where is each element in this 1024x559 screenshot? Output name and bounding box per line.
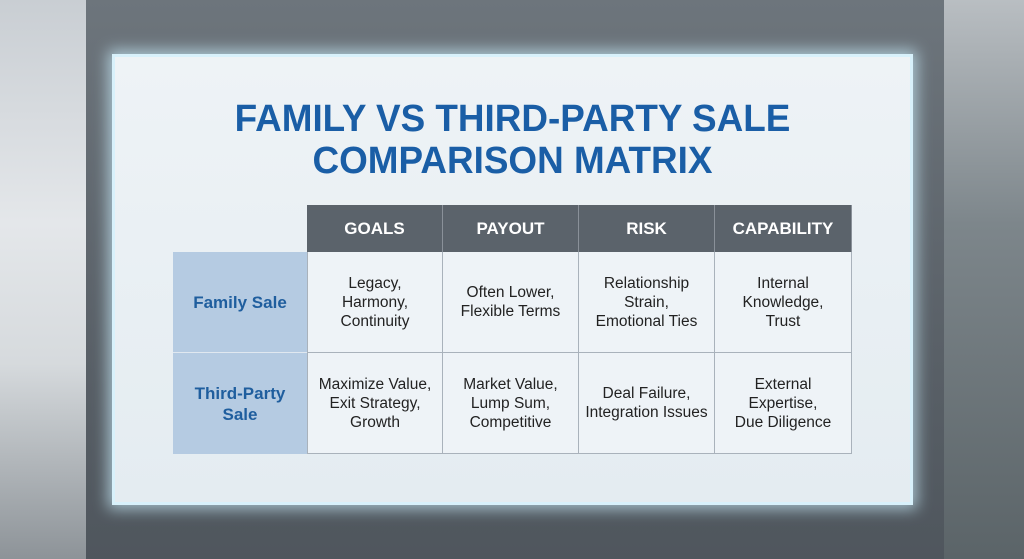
third-party goals (307, 353, 443, 454)
family payout: Often Lower, (467, 284, 554, 301)
family payout (443, 252, 579, 353)
row label: family sale (173, 252, 307, 353)
third-party capability: Due Diligence (735, 414, 831, 430)
row label: family sale: Family Sale (193, 292, 287, 312)
third-party payout: Market Value, (463, 376, 558, 392)
title: FAMILY VS THIRD-PARTY SALE (235, 98, 790, 140)
header: risk: RISK (626, 218, 667, 238)
family risk: Emotional Ties (596, 312, 697, 330)
title (235, 98, 790, 182)
third-party risk (579, 353, 715, 454)
header: risk (579, 205, 715, 252)
header: goals (307, 205, 443, 252)
family capability: Trust (766, 312, 800, 330)
row label: third-party sale: Sale (222, 404, 257, 424)
family goals: Legacy, (348, 274, 402, 292)
title: COMPARISON MATRIX (312, 140, 712, 182)
row label: third-party sale: Third-Party (195, 384, 285, 402)
third-party capability: Expertise, (749, 394, 817, 412)
third-party capability (715, 353, 852, 454)
third-party capability: External (755, 376, 811, 392)
row label: third-party sale (173, 353, 307, 454)
third-party risk: Integration Issues (585, 404, 708, 421)
family risk: Relationship (604, 274, 689, 292)
family risk (579, 252, 715, 353)
header: payout: PAYOUT (476, 218, 545, 238)
third-party goals: Growth (350, 414, 400, 430)
glowing panel (112, 54, 913, 505)
family capability: Knowledge, (742, 294, 824, 310)
third-party risk: Deal Failure, (603, 385, 690, 402)
header: payout (443, 205, 579, 252)
comparison table (173, 205, 852, 454)
background: right glass (944, 0, 1024, 559)
header: capability (715, 205, 852, 252)
third-party goals: Exit Strategy, (329, 394, 421, 412)
third-party payout: Lump Sum, (471, 394, 550, 412)
header: goals: GOALS (344, 218, 405, 238)
family risk: Strain, (624, 294, 669, 310)
family capability (715, 252, 852, 353)
family capability: Internal (757, 274, 809, 292)
family goals: Harmony, (342, 294, 408, 310)
family goals: Continuity (341, 312, 409, 330)
third-party goals: Maximize Value, (319, 376, 431, 392)
background: left office (0, 0, 86, 559)
family payout: Flexible Terms (461, 303, 560, 320)
third-party payout (443, 353, 579, 454)
family goals (307, 252, 443, 353)
third-party payout: Competitive (470, 414, 551, 430)
header: capability: CAPABILITY (733, 218, 833, 238)
